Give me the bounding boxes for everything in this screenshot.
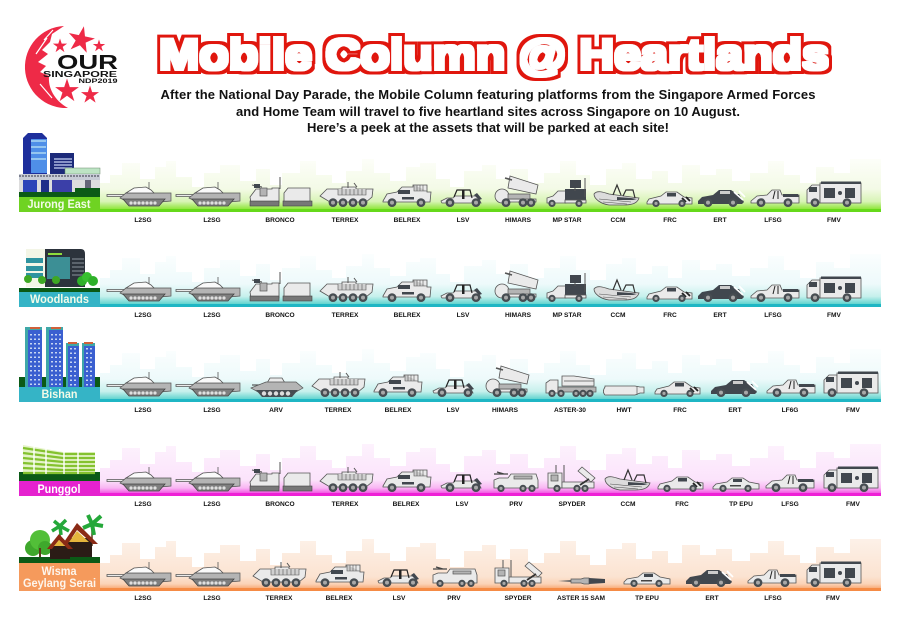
vehicle: BRONCO <box>250 462 312 508</box>
location label: Wisma Geylang Serai: Wisma <box>42 564 77 578</box>
vehicle: SPYDER: SPYDER <box>558 501 586 508</box>
vehicle: HIMARS <box>486 366 529 414</box>
vehicle: TERREX <box>320 467 373 508</box>
vehicle: BELREX <box>383 280 431 319</box>
vehicle: TERREX <box>312 372 365 414</box>
vehicle: ERT: ERT <box>728 407 742 414</box>
location label: Wisma Geylang Serai: Geylang Serai <box>23 576 96 590</box>
vehicle: L2SG: L2SG <box>134 407 152 414</box>
vehicle: TERREX <box>320 182 373 224</box>
vehicle: ERT <box>711 380 758 414</box>
vehicle: TP EPU <box>624 573 670 602</box>
icon: Bishan towers <box>19 327 100 387</box>
vehicle: LFSG: LFSG <box>764 595 782 602</box>
vehicle: BELREX <box>383 185 431 224</box>
vehicle: LSV: LSV <box>456 501 469 508</box>
vehicle: ERT: ERT <box>705 595 719 602</box>
vehicle: TERREX: TERREX <box>332 217 359 224</box>
vehicle: TERREX: TERREX <box>325 407 352 414</box>
vehicle: TERREX <box>253 562 306 602</box>
vehicle: L2SG <box>176 372 240 414</box>
location label: Bishan: Bishan <box>42 387 78 401</box>
intro text: After the National Day Parade, the Mobile Column featuring platforms from the Singapore Armed Forces <box>160 87 816 102</box>
vehicle: L2SG <box>107 467 171 508</box>
location label: Wisma Geylang Serai <box>19 563 100 591</box>
vehicle: L2SG: L2SG <box>134 595 152 602</box>
icon: Jurong East buildings <box>19 133 100 197</box>
vehicle: LFSG: LFSG <box>764 217 782 224</box>
title: Mobile Column @ Heartlands <box>159 31 829 79</box>
vehicle: TERREX <box>320 277 373 319</box>
location label: Punggol: Punggol <box>38 482 80 496</box>
vehicle: ASTER 15 SAM <box>557 578 606 602</box>
location label: Punggol <box>19 481 100 496</box>
panel: Wisma Geylang Serai <box>19 515 881 602</box>
vehicle: L2SG: L2SG <box>203 312 221 319</box>
panel: Woodlands <box>19 249 881 319</box>
vehicle: L2SG: L2SG <box>203 501 221 508</box>
vehicle: PRV <box>494 472 538 508</box>
vehicle: L2SG <box>107 562 171 602</box>
vehicle: LSV: LSV <box>447 407 460 414</box>
vehicle: L2SG: L2SG <box>203 595 221 602</box>
vehicle: LF6G: LF6G <box>782 407 798 414</box>
vehicle: BRONCO <box>250 177 312 224</box>
vehicle: LSV: LSV <box>457 312 470 319</box>
vehicle: HIMARS <box>495 176 538 224</box>
vehicle: FRC <box>647 287 692 319</box>
vehicle: L2SG <box>107 277 171 319</box>
vehicle: FMV <box>807 562 861 602</box>
vehicle: CCM <box>605 470 650 508</box>
vehicle: TP EPU: TP EPU <box>635 595 659 602</box>
vehicle: LF6G <box>767 380 815 414</box>
vehicle: L2SG <box>176 277 240 319</box>
vehicle: LFSG <box>751 285 799 319</box>
vehicle: FRC: FRC <box>663 312 677 319</box>
icon: Wisma Geylang Serai houses and palms <box>19 515 103 563</box>
vehicle: L2SG <box>176 562 240 602</box>
panel: Jurong East <box>19 133 881 224</box>
vehicle: SPYDER <box>495 560 542 602</box>
vehicle: L2SG <box>176 467 240 508</box>
vehicle: FMV <box>807 182 861 224</box>
vehicle: TERREX: TERREX <box>332 501 359 508</box>
vehicle: HWT <box>604 386 644 414</box>
vehicle: TERREX: TERREX <box>332 312 359 319</box>
vehicle: LFSG <box>751 190 799 224</box>
vehicle: LFSG <box>766 475 814 508</box>
logo: Our Singapore NDP2019: NDP2019 <box>78 79 118 85</box>
vehicle: BRONCO: BRONCO <box>265 312 295 319</box>
vehicle: ASTER-30: ASTER-30 <box>554 407 586 414</box>
vehicle: CCM: CCM <box>620 501 636 508</box>
vehicle: TP EPU <box>713 478 759 508</box>
vehicle: L2SG <box>176 182 240 224</box>
vehicle: FMV: FMV <box>846 501 861 508</box>
vehicle: ERT <box>698 285 745 319</box>
vehicle: ARV <box>251 378 303 414</box>
vehicle: FRC <box>658 477 703 508</box>
vehicle: HIMARS: HIMARS <box>505 312 532 319</box>
intro text <box>160 87 816 135</box>
intro text: and Home Team will travel to five heartland sites across Singapore on 10 August. <box>236 104 740 119</box>
logo: Our Singapore NDP2019: OUR <box>57 52 119 74</box>
vehicle: BELREX <box>383 470 431 508</box>
vehicle: PRV <box>433 567 477 602</box>
vehicle: ERT: ERT <box>713 312 727 319</box>
vehicle: ASTER 15 SAM: ASTER 15 SAM <box>557 595 606 602</box>
vehicle: FMV: FMV <box>826 595 841 602</box>
vehicle: LSV: LSV <box>393 595 406 602</box>
vehicle: LSV <box>378 570 419 602</box>
panel: Bishan <box>19 327 881 414</box>
vehicle: MP STAR: MP STAR <box>552 217 582 224</box>
vehicle: LSV <box>441 285 482 319</box>
vehicle: SPYDER: SPYDER <box>504 595 532 602</box>
vehicle: BRONCO <box>250 272 312 319</box>
vehicle: CCM: CCM <box>610 312 626 319</box>
vehicle: FMV: FMV <box>827 217 842 224</box>
vehicle: BELREX: BELREX <box>385 407 412 414</box>
vehicle: L2SG: L2SG <box>134 501 152 508</box>
vehicle: BELREX: BELREX <box>393 501 420 508</box>
vehicle: BRONCO: BRONCO <box>265 217 295 224</box>
vehicle: FMV <box>824 372 878 414</box>
vehicle: ASTER-30 <box>546 376 596 414</box>
vehicle: PRV: PRV <box>447 595 461 602</box>
vehicle: FRC: FRC <box>675 501 689 508</box>
vehicle: ERT <box>686 570 733 602</box>
vehicle: LSV <box>433 380 474 414</box>
vehicle: L2SG: L2SG <box>203 407 221 414</box>
vehicle: CCM: CCM <box>610 217 626 224</box>
vehicle: MP STAR <box>547 273 586 319</box>
vehicle: MP STAR <box>547 178 586 224</box>
vehicle: MP STAR: MP STAR <box>552 312 582 319</box>
vehicle: CCM <box>594 185 639 224</box>
icon: Punggol building <box>19 445 100 482</box>
vehicle: LFSG: LFSG <box>781 501 799 508</box>
vehicle: LSV <box>441 475 482 508</box>
vehicle: BELREX: BELREX <box>326 595 353 602</box>
vehicle: LFSG: LFSG <box>764 312 782 319</box>
vehicle: PRV: PRV <box>509 501 523 508</box>
panel: Punggol <box>19 444 881 508</box>
vehicle: BELREX <box>316 565 364 602</box>
vehicle: HIMARS <box>495 271 538 319</box>
vehicle: BRONCO: BRONCO <box>265 501 295 508</box>
vehicle: L2SG: L2SG <box>134 217 152 224</box>
vehicle: BELREX: BELREX <box>394 217 421 224</box>
vehicle: LFSG <box>748 570 796 602</box>
vehicle: LSV <box>441 190 482 224</box>
vehicle: ERT <box>698 190 745 224</box>
vehicle: SPYDER <box>548 465 595 508</box>
vehicle: HIMARS: HIMARS <box>492 407 519 414</box>
location label: Bishan <box>19 387 100 402</box>
vehicle: FRC <box>655 382 700 414</box>
vehicle: CCM <box>594 280 639 319</box>
logo: Our Singapore NDP2019: SINGAPORE <box>43 70 118 79</box>
logo: Our Singapore NDP2019 <box>25 24 119 108</box>
vehicle: L2SG: L2SG <box>203 217 221 224</box>
location label: Woodlands: Woodlands <box>30 292 89 306</box>
intro text: Here’s a peek at the assets that will be parked at each site! <box>307 120 669 135</box>
vehicle: L2SG <box>107 182 171 224</box>
vehicle: BELREX <box>374 375 422 414</box>
vehicle: L2SG: L2SG <box>134 312 152 319</box>
vehicle: BELREX: BELREX <box>394 312 421 319</box>
vehicle: FMV: FMV <box>827 312 842 319</box>
vehicle: FRC: FRC <box>663 217 677 224</box>
vehicle: L2SG <box>107 372 171 414</box>
vehicle: FRC: FRC <box>673 407 687 414</box>
vehicle: FMV <box>807 276 861 319</box>
vehicle: FMV <box>824 466 878 508</box>
vehicle: TP EPU: TP EPU <box>729 501 753 508</box>
vehicle: FRC <box>647 192 692 224</box>
vehicle: TERREX: TERREX <box>266 595 293 602</box>
icon: Woodlands building <box>19 249 100 292</box>
vehicle: FMV: FMV <box>846 407 861 414</box>
location label: Jurong East: Jurong East <box>28 197 90 211</box>
vehicle: HWT: HWT <box>616 407 632 414</box>
vehicle: LSV: LSV <box>457 217 470 224</box>
vehicle: HIMARS: HIMARS <box>505 217 532 224</box>
vehicle: ARV: ARV <box>269 407 283 414</box>
vehicle: ERT: ERT <box>713 217 727 224</box>
